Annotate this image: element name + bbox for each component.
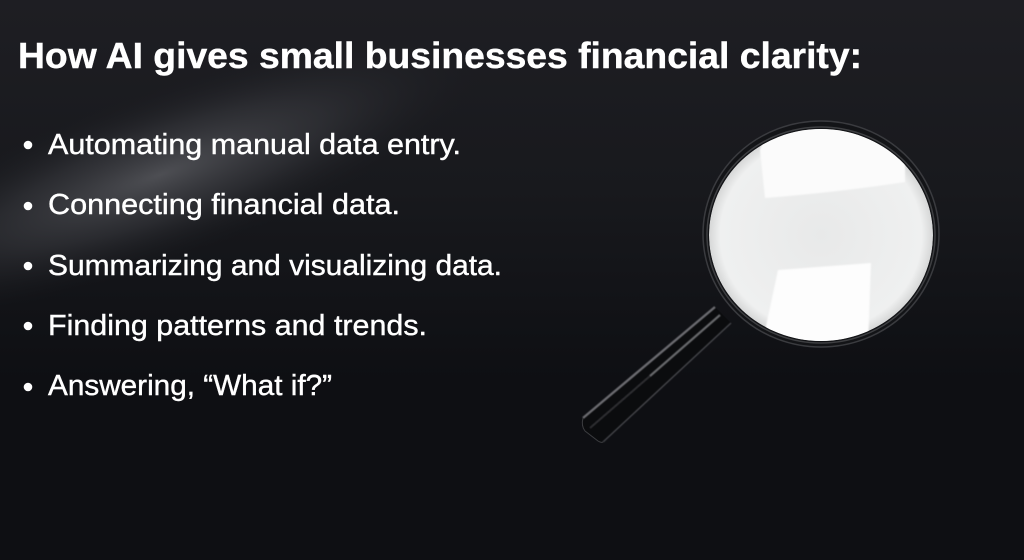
icon: magnifying glass [582,120,939,442]
title: How AI gives small businesses financial clarity: [18,35,862,76]
bullet: what if: Answering, “What if?” [48,370,332,402]
bullet: automating: Automating manual data entry. [48,129,461,161]
magnifier frame [703,121,939,347]
magnifier lens [709,120,933,345]
bullet list [24,129,502,402]
bullet: connecting: Connecting financial data. [48,189,400,221]
bullet: summarizing: Summarizing and visualizing data. [48,250,502,282]
bullet: patterns: Finding patterns and trends. [48,310,427,342]
magnifier handle [582,307,731,442]
lens reflections [760,120,905,345]
